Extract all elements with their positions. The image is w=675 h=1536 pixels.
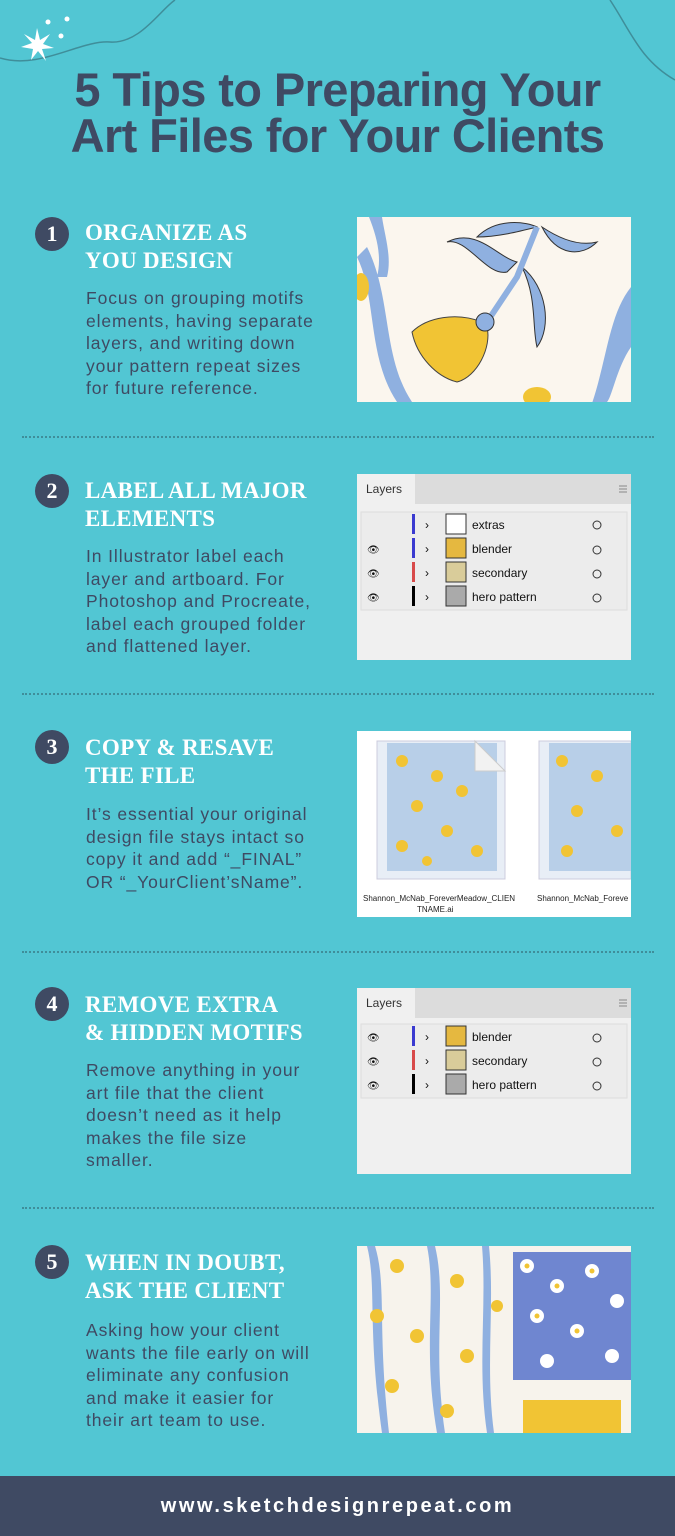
heading 3 <box>85 735 274 788</box>
body 4: smaller. <box>86 1150 154 1170</box>
image: layers panel 2: blender <box>472 1030 512 1044</box>
image: pattern collage <box>357 1246 631 1433</box>
image: layers panel: Layers <box>366 482 402 496</box>
body 2 <box>86 546 311 656</box>
number badge 4: 4 <box>46 991 58 1016</box>
image: layers panel: secondary <box>472 566 527 580</box>
heading 4: REMOVE EXTRA <box>85 992 278 1017</box>
footer: www.sketchdesignrepeat.com <box>161 1495 514 1517</box>
image: layers panel 2: 👁 <box>367 1081 380 1092</box>
heading 4 <box>85 992 303 1045</box>
image: layers panel 2: › <box>425 1054 429 1068</box>
heading 1: YOU DESIGN <box>85 248 233 273</box>
body 2: Photoshop and Procreate, <box>86 591 311 611</box>
heading 5 <box>85 1250 285 1303</box>
section 3 <box>35 730 631 917</box>
image: layers panel 2: Layers <box>366 996 402 1010</box>
section 4 <box>35 987 631 1174</box>
heading 5: ASK THE CLIENT <box>85 1278 284 1303</box>
body 3: copy it and add “_FINAL” <box>86 849 302 869</box>
body 5: and make it easier for <box>86 1388 274 1408</box>
body 5: wants the file early on will <box>86 1343 310 1363</box>
image: layers panel 2: › <box>425 1030 429 1044</box>
title: Art Files for Your Clients <box>71 109 604 162</box>
image: layers panel: › <box>425 590 429 604</box>
image: layers panel: 👁 <box>367 569 380 580</box>
image: layers panel 2: › <box>425 1078 429 1092</box>
image: layers panel 2 <box>357 988 631 1174</box>
image: flower vector <box>357 217 631 402</box>
image: layers panel: › <box>425 566 429 580</box>
title: 5 Tips to Preparing Your <box>74 63 601 116</box>
image: layers panel: hero pattern <box>472 590 537 604</box>
image: file icons: TNAME.ai <box>417 905 454 914</box>
heading 1: ORGANIZE AS <box>85 220 247 245</box>
number badge 4 <box>35 987 69 1021</box>
image: layers panel 2: secondary <box>472 1054 527 1068</box>
body 4 <box>86 1060 300 1170</box>
heading 4: & HIDDEN MOTIFS <box>85 1020 303 1045</box>
number badge 1: 1 <box>46 221 58 246</box>
body 3 <box>86 804 307 892</box>
body 4: doesn’t need as it help <box>86 1105 282 1125</box>
number badge 5: 5 <box>46 1249 58 1274</box>
body 1: Focus on grouping motifs <box>86 288 304 308</box>
image: layers panel 2: 👁 <box>367 1057 380 1068</box>
body 3: design file stays intact so <box>86 827 305 847</box>
title <box>71 63 604 162</box>
heading 1 <box>85 220 247 273</box>
body 2: and flattened layer. <box>86 636 252 656</box>
image: layers panel 2: 👁 <box>367 1033 380 1044</box>
section 1 <box>35 217 631 402</box>
number badge 2: 2 <box>46 478 58 503</box>
number badge 3: 3 <box>46 734 58 759</box>
footer <box>0 1476 675 1536</box>
number badge 3 <box>35 730 69 764</box>
section 5 <box>35 1245 631 1433</box>
body 5: Asking how your client <box>86 1320 280 1340</box>
body 1: your pattern repeat sizes <box>86 356 301 376</box>
section 2 <box>35 474 631 660</box>
body 5: their art team to use. <box>86 1410 266 1430</box>
body 5 <box>86 1320 310 1430</box>
body 3: OR “_YourClient’sName”. <box>86 872 303 892</box>
image: layers panel: › <box>425 518 429 532</box>
heading 2: ELEMENTS <box>85 506 215 531</box>
image: layers panel 2: hero pattern <box>472 1078 537 1092</box>
body 3: It’s essential your original <box>86 804 307 824</box>
body 2: layer and artboard. For <box>86 569 285 589</box>
number badge 1 <box>35 217 69 251</box>
number badge 5 <box>35 1245 69 1279</box>
body 4: art file that the client <box>86 1083 264 1103</box>
image: file icons: Shannon_McNab_Foreve <box>537 894 629 903</box>
image: file icons: Shannon_McNab_ForeverMeadow_CLIEN <box>363 894 515 903</box>
heading 2: LABEL ALL MAJOR <box>85 478 307 503</box>
image: layers panel: extras <box>472 518 505 532</box>
body 1 <box>86 288 314 398</box>
body 2: In Illustrator label each <box>86 546 285 566</box>
heading 3: COPY & RESAVE <box>85 735 274 760</box>
body 1: layers, and writing down <box>86 333 295 353</box>
body 1: for future reference. <box>86 378 259 398</box>
body 2: label each grouped folder <box>86 614 306 634</box>
image: layers panel <box>357 474 631 660</box>
body 4: makes the file size <box>86 1128 247 1148</box>
body 1: elements, having separate <box>86 311 314 331</box>
number badge 2 <box>35 474 69 508</box>
image: layers panel: blender <box>472 542 512 556</box>
heading 5: WHEN IN DOUBT, <box>85 1250 285 1275</box>
heading 2 <box>85 478 307 531</box>
image: layers panel: 👁 <box>367 545 380 556</box>
body 5: eliminate any confusion <box>86 1365 290 1385</box>
image: layers panel: › <box>425 542 429 556</box>
image: layers panel: 👁 <box>367 593 380 604</box>
decorative curves and sparkle <box>0 0 675 80</box>
body 4: Remove anything in your <box>86 1060 300 1080</box>
heading 3: THE FILE <box>85 763 195 788</box>
image: file icons <box>357 731 631 917</box>
